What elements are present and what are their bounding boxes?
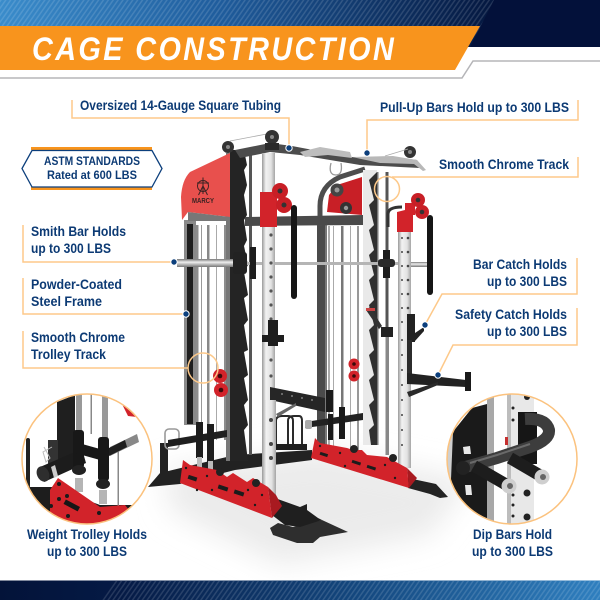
- callout: smith bar: up to 300 LBS: [31, 241, 111, 256]
- callout: bar catch: Bar Catch Holds: [473, 257, 567, 272]
- callout: pull-up bars: Pull-Up Bars Hold up to 300 LBS: [380, 100, 569, 115]
- left pulley block: [260, 183, 292, 227]
- rear left post: [184, 220, 196, 425]
- title banner: [0, 26, 480, 70]
- label: dip bars: [472, 527, 553, 559]
- label: weight trolley: Weight Trolley Holds: [27, 527, 147, 542]
- rear right post: [317, 225, 327, 445]
- right rear foot: [408, 478, 448, 498]
- callout: smooth chrome track: [374, 157, 578, 202]
- label: weight trolley: up to 300 LBS: [47, 544, 127, 559]
- callout: trolley track: [23, 330, 218, 383]
- callout: bar catch: up to 300 LBS: [487, 274, 567, 289]
- inset: dip bars: [446, 394, 577, 524]
- header accent line: [0, 61, 600, 78]
- callout: pull-up bars: [364, 100, 578, 156]
- rear base and storage: [148, 416, 312, 487]
- right red foot panel: [311, 438, 417, 488]
- callout: smith bar: [23, 224, 177, 265]
- callout: powder-coated frame: Powder-Coated: [31, 277, 122, 292]
- right cage rails and cables: [328, 226, 359, 451]
- badge: ASTM standards: Rated at 600 LBS: [47, 168, 137, 182]
- footer band: [0, 580, 600, 600]
- left chrome foreground upright lower: [262, 400, 276, 495]
- callout: trolley track: Smooth Chrome: [31, 330, 125, 345]
- cross beam: [245, 215, 363, 226]
- center clamp: [366, 307, 393, 337]
- left red plate with logo: MARCY: [192, 196, 214, 205]
- left strap handle: [291, 208, 297, 296]
- callout: powder-coated frame: [23, 277, 189, 317]
- left red plate with logo: [181, 153, 230, 221]
- right strap handle: [427, 218, 433, 292]
- floor shadow: [165, 450, 470, 565]
- header band: [0, 0, 600, 47]
- fitness cage machine: [148, 130, 471, 543]
- top frame beam: [235, 143, 420, 168]
- toothed dark column: [226, 150, 252, 461]
- left bar catch: [262, 320, 284, 346]
- right weight stack pulleys: [348, 358, 360, 382]
- center safety arm: [270, 387, 333, 417]
- callout: oversized tubing: [72, 98, 292, 151]
- center track rods: [386, 172, 389, 455]
- callout: smooth chrome track: Smooth Chrome Track: [439, 157, 569, 172]
- left red foot panel: [180, 460, 282, 518]
- left front chrome upright: [262, 153, 275, 495]
- pull-up bars: [300, 147, 426, 175]
- title banner: CAGE CONSTRUCTION: [32, 32, 395, 67]
- callout: oversized tubing: Oversized 14-Gauge Square Tubing: [80, 98, 281, 113]
- toothed chrome column: [363, 170, 378, 445]
- callout: safety catch: Safety Catch Holds: [455, 307, 567, 322]
- right front chrome upright: [398, 228, 411, 468]
- right pulley block: [388, 193, 429, 232]
- safety catch arm: [407, 340, 471, 397]
- left trolley: [168, 422, 227, 473]
- callout: safety catch: up to 300 LBS: [487, 324, 567, 339]
- right trolley: [305, 407, 363, 440]
- callout: smith bar: Smith Bar Holds: [31, 224, 126, 239]
- left weight stack pulleys: [213, 369, 228, 397]
- badge: ASTM standards: ASTM STANDARDS: [44, 154, 140, 168]
- callout: bar catch: [422, 257, 577, 328]
- right arch frame with red panel: [320, 169, 365, 226]
- bar catch: [407, 314, 424, 342]
- callout: trolley track: Trolley Track: [31, 347, 106, 362]
- callout: safety catch: [435, 307, 577, 378]
- left cage rails and cables: [196, 225, 226, 440]
- label: dip bars: up to 300 LBS: [472, 544, 553, 559]
- callout: powder-coated frame: Steel Frame: [31, 294, 102, 309]
- top pulleys: [222, 130, 416, 158]
- label: weight trolley: [27, 527, 147, 559]
- smith bar: [177, 247, 428, 279]
- inset: weight trolley: [22, 394, 152, 530]
- badge: ASTM standards: [22, 147, 162, 190]
- left front foot plate: [270, 497, 348, 543]
- label: dip bars: Dip Bars Hold: [473, 527, 552, 542]
